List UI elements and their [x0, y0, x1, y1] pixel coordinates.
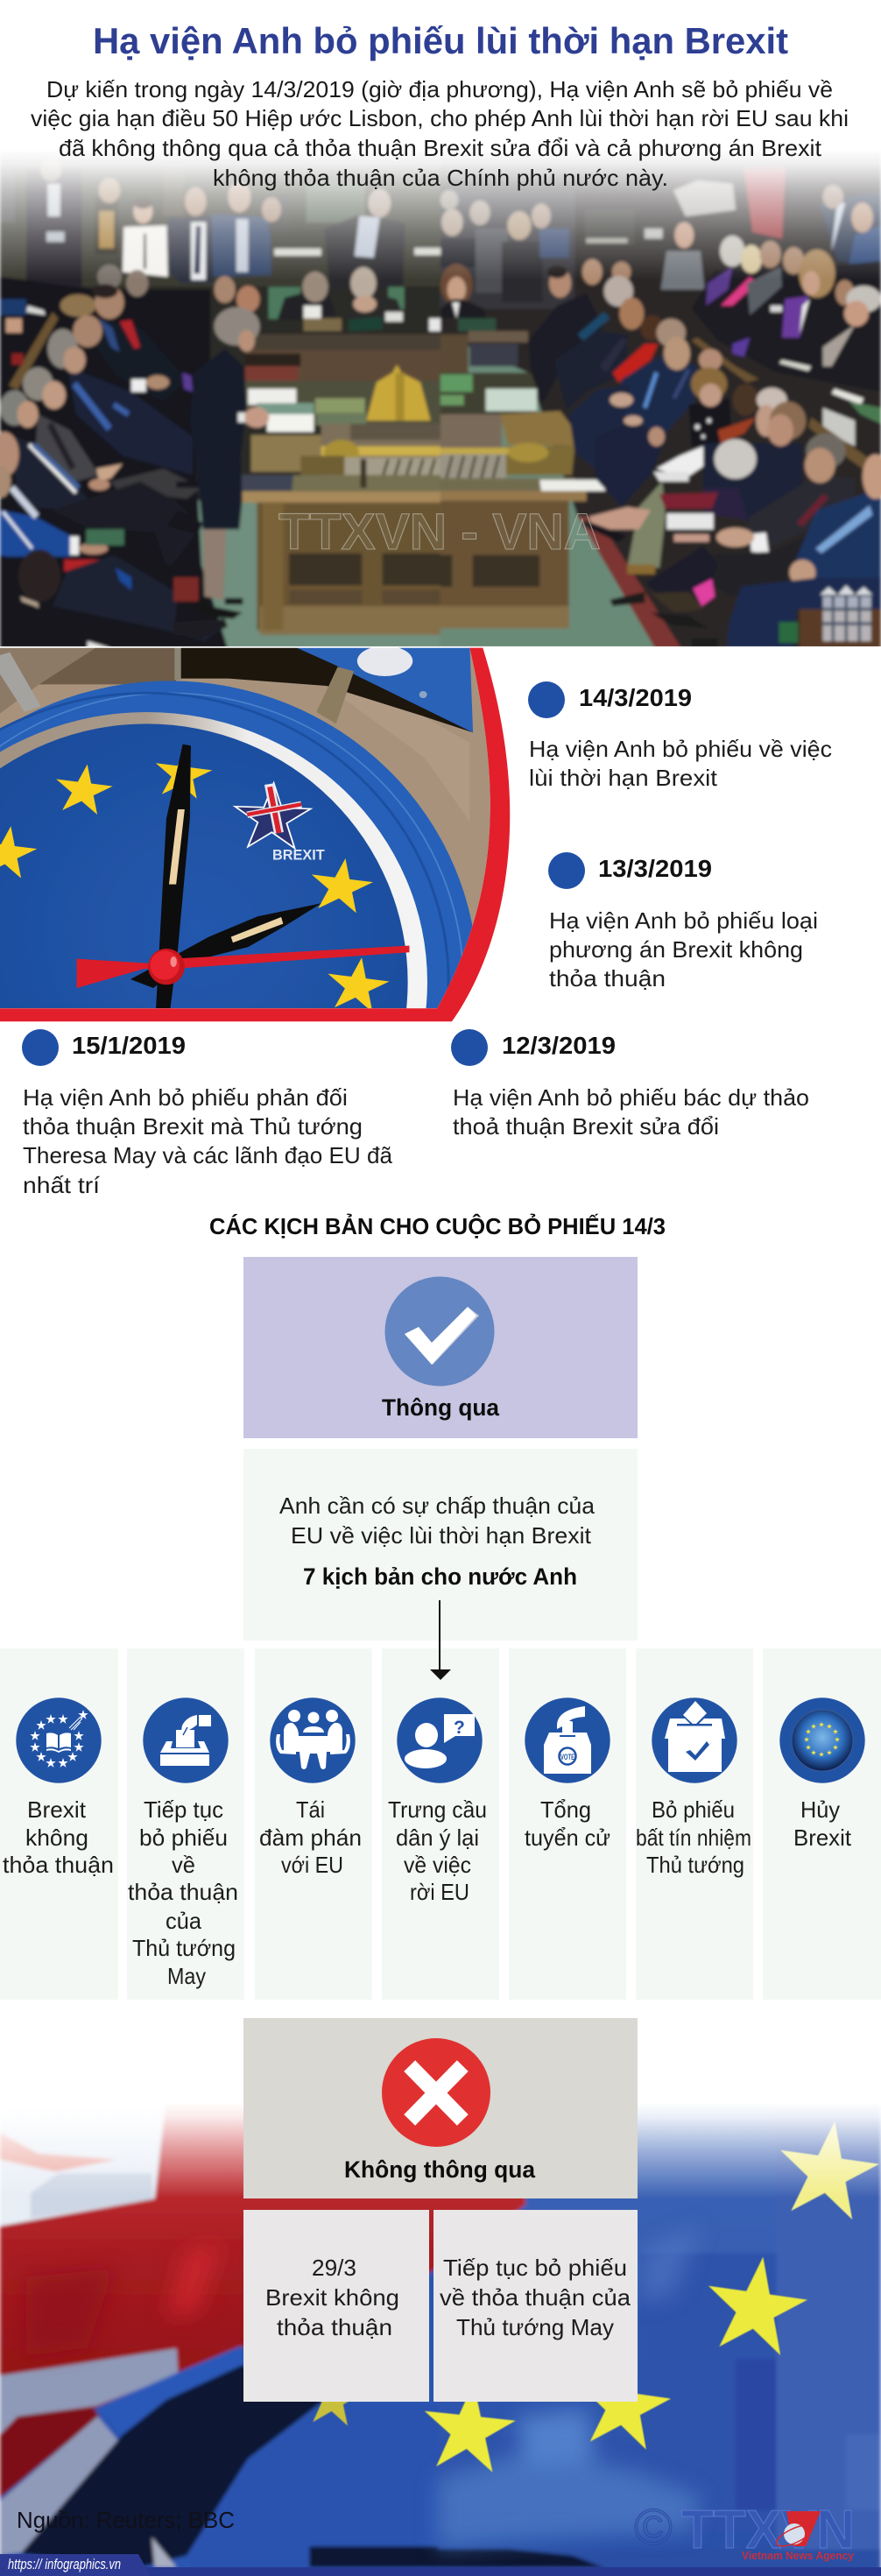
label: không: [25, 1824, 88, 1851]
panel: not approved: [243, 2018, 638, 2198]
section heading: CÁC KỊCH BẢN CHO CUỘC BỎ PHIẾU 14/3: [209, 1212, 666, 1239]
alarm bell: [293, 646, 473, 732]
label: bất tín nhiệm: [636, 1824, 751, 1851]
intro paragraph: không thỏa thuận của Chính phủ nước này.: [213, 165, 668, 191]
panel: approved: [243, 1257, 638, 1438]
title: Hạ viện Anh bỏ phiếu lùi thời hạn Brexit: [93, 20, 788, 61]
label: tuyển cử: [525, 1824, 610, 1851]
label: Tiếp tục: [144, 1796, 223, 1823]
description: Hạ viện Anh bỏ phiếu loại: [549, 907, 818, 934]
label: [388, 1796, 487, 1905]
intro paragraph: việc gia hạn điều 50 Hiệp ước Lisbon, cho phép Anh lùi thời hạn rời EU sau khi: [31, 105, 849, 131]
intro paragraph: [31, 76, 849, 191]
clock photo with red frame: [0, 648, 510, 1021]
text: [440, 2255, 631, 2340]
description: [23, 1084, 393, 1198]
label: Thủ tướng: [132, 1935, 236, 1961]
icon: ballot box with hand: [143, 1697, 229, 1783]
label: Thủ tướng: [646, 1852, 744, 1878]
EU stars: [0, 745, 392, 1013]
background: UK and EU flags: [0, 2102, 881, 2576]
papers and green trays: [248, 389, 296, 405]
label: về: [172, 1852, 195, 1878]
TTXVN logo watermark: TTXVN: [681, 2500, 855, 2560]
icon: check mark: [385, 1277, 494, 1386]
label: Brexit: [793, 1824, 852, 1851]
bezel: [0, 681, 473, 1009]
description: thỏa thuận Brexit mà Thủ tướng: [23, 1113, 363, 1140]
photo watermark: TTXVN - VNA: TTXVN - VNA: [278, 504, 601, 561]
lower items: [319, 423, 441, 459]
date marker: [451, 1029, 488, 1066]
upper people: [440, 190, 574, 308]
icon: person with question bubble: ?: [454, 1718, 465, 1738]
Brexit star logo: [231, 780, 314, 850]
icon: vote box: [525, 1697, 610, 1783]
label: đàm phán: [259, 1824, 362, 1851]
icon: EU globe button: [779, 1697, 865, 1783]
subheading: 7 kịch bản cho nước Anh: [303, 1563, 577, 1590]
label: về việc: [404, 1852, 471, 1878]
text: Thủ tướng May: [456, 2314, 614, 2340]
label: Tái: [296, 1796, 325, 1823]
label: thỏa thuận: [128, 1879, 238, 1905]
description: Hạ viện Anh bỏ phiếu bác dự thảo: [453, 1084, 809, 1111]
label: Thông qua: [382, 1394, 500, 1421]
label: Bỏ phiếu: [652, 1796, 735, 1823]
legs and papers: [627, 482, 666, 568]
label: bỏ phiếu: [139, 1824, 228, 1851]
label: [259, 1796, 362, 1878]
clerks: [269, 287, 300, 319]
icon: meeting around table: [270, 1697, 356, 1783]
scenario 1: no-deal Brexit: [3, 1697, 114, 1878]
label: thỏa thuận: [3, 1852, 114, 1878]
label: dân ý lại: [396, 1824, 479, 1851]
label: Tổng: [540, 1796, 591, 1823]
date: 13/3/2019: [598, 855, 712, 882]
date: 14/3/2019: [579, 684, 692, 711]
source: Nguồn: Reuters; BBC: [17, 2507, 235, 2533]
body text: Anh cần có sự chấp thuận của: [279, 1493, 596, 1519]
bell posts: [0, 653, 41, 712]
label: Hủy: [800, 1796, 840, 1823]
fade into white: [0, 2102, 881, 2198]
label: của: [166, 1908, 202, 1934]
footer bar: [0, 2554, 881, 2576]
website link: https:// infographics.vn: [8, 2556, 121, 2572]
icon: book and stars: [16, 1697, 102, 1783]
clock hands: [156, 745, 191, 1008]
label: [525, 1796, 610, 1851]
description: Theresa May và các lãnh đạo EU đã: [23, 1142, 393, 1168]
label: Không thông qua: [344, 2156, 536, 2183]
text: về thỏa thuận của: [440, 2284, 631, 2311]
red frame: [0, 648, 510, 1021]
timeline: 14/3/2019: [528, 681, 832, 791]
UK flag side: [0, 2102, 525, 2576]
scenario 6: no-confidence vote: [636, 1697, 751, 1878]
right side background: [438, 345, 657, 646]
panel: EU approval text: [243, 1449, 638, 1641]
label: [793, 1796, 852, 1851]
label: Brexit: [27, 1796, 87, 1823]
intro paragraph: đã không thông qua cả thỏa thuận Brexit sửa đổi và cả phương án Brexit: [59, 135, 822, 161]
white fade over photo top: [0, 149, 881, 280]
date marker: [548, 852, 585, 889]
arrow: [430, 1600, 451, 1680]
text: thỏa thuận: [277, 2314, 392, 2340]
date marker: [22, 1029, 59, 1066]
description: thỏa thuận: [549, 965, 666, 992]
label: [636, 1796, 751, 1878]
description: Hạ viện Anh bỏ phiếu về việc: [529, 736, 832, 762]
scenario 2: continue voting on May's deal: [128, 1697, 238, 1989]
text: [265, 2255, 399, 2340]
scenario 4: second referendum: [388, 1697, 487, 1905]
description: [453, 1084, 809, 1140]
scenario 7: cancel Brexit: [779, 1697, 865, 1851]
icon: person with question bubble: [397, 1697, 483, 1783]
label: rời EU: [410, 1879, 469, 1905]
text: Brexit không: [265, 2284, 399, 2311]
panel: no-deal Brexit on 29/3: [243, 2210, 429, 2402]
panels: seven scenario columns: [0, 1648, 881, 2000]
text: Tiếp tục bỏ phiếu: [443, 2255, 627, 2281]
clock photo with red frame: BREXIT: [272, 846, 325, 863]
timeline: 15/1/2019: [22, 1029, 393, 1198]
inner ring and dial: [0, 712, 427, 1009]
red carpet stripe: [578, 517, 681, 648]
right heads: [441, 209, 462, 236]
left heads: [97, 265, 122, 289]
description: lùi thời hạn Brexit: [529, 765, 718, 791]
description: nhất trí: [23, 1172, 101, 1198]
scenario 3: renegotiate with EU: [259, 1697, 362, 1878]
icon: ballot box with check: [652, 1697, 737, 1783]
intro paragraph: Dự kiến trong ngày 14/3/2019 (giờ địa phương), Hạ viện Anh sẽ bỏ phiếu về: [46, 76, 833, 102]
scenario 5: general election: [525, 1697, 610, 1851]
description: phương án Brexit không: [549, 936, 803, 963]
clerks' table: [245, 349, 441, 382]
front table: [257, 502, 440, 630]
panel: continue voting on May's deal: [433, 2210, 638, 2402]
photo: UK House of Commons chamber: [0, 149, 881, 648]
date: 12/3/2019: [502, 1032, 616, 1059]
icon: cross: [382, 2038, 490, 2147]
left benches: [0, 277, 228, 648]
text: 29/3: [312, 2255, 356, 2281]
icon: vote box: VOTE: [560, 1753, 574, 1761]
EU flag side: [438, 2102, 881, 2576]
date marker: [528, 681, 565, 718]
first-row suits: [529, 294, 602, 400]
description: thoả thuận Brexit sửa đổi: [453, 1113, 719, 1140]
standing back row: [26, 191, 82, 288]
parliament logo: [800, 610, 881, 648]
timeline: 12/3/2019: [451, 1029, 809, 1140]
timeline: 13/3/2019: [548, 852, 818, 992]
description: [529, 736, 832, 791]
TTXVN logo watermark: Vietnam News Agency: [742, 2549, 855, 2562]
TTXVN logo watermark: ©: [634, 2499, 673, 2556]
date: 15/1/2019: [72, 1032, 186, 1059]
EU flag stars: [302, 2114, 881, 2474]
body text: EU về việc lùi thời hạn Brexit: [291, 1522, 592, 1549]
label: Trưng cầu: [388, 1796, 487, 1823]
prime minister: [190, 349, 247, 529]
label: [128, 1796, 238, 1989]
description: Hạ viện Anh bỏ phiếu phản đối: [23, 1084, 348, 1111]
body text: [279, 1493, 596, 1549]
carpet: [195, 498, 442, 646]
gold ornament: [366, 364, 431, 420]
label: với EU: [281, 1852, 343, 1878]
soft flag highlights: [26, 2225, 701, 2549]
second row right: [692, 261, 881, 392]
label: [3, 1796, 114, 1878]
table right part: [440, 335, 469, 373]
description: [549, 907, 818, 992]
label: May: [167, 1963, 206, 1989]
